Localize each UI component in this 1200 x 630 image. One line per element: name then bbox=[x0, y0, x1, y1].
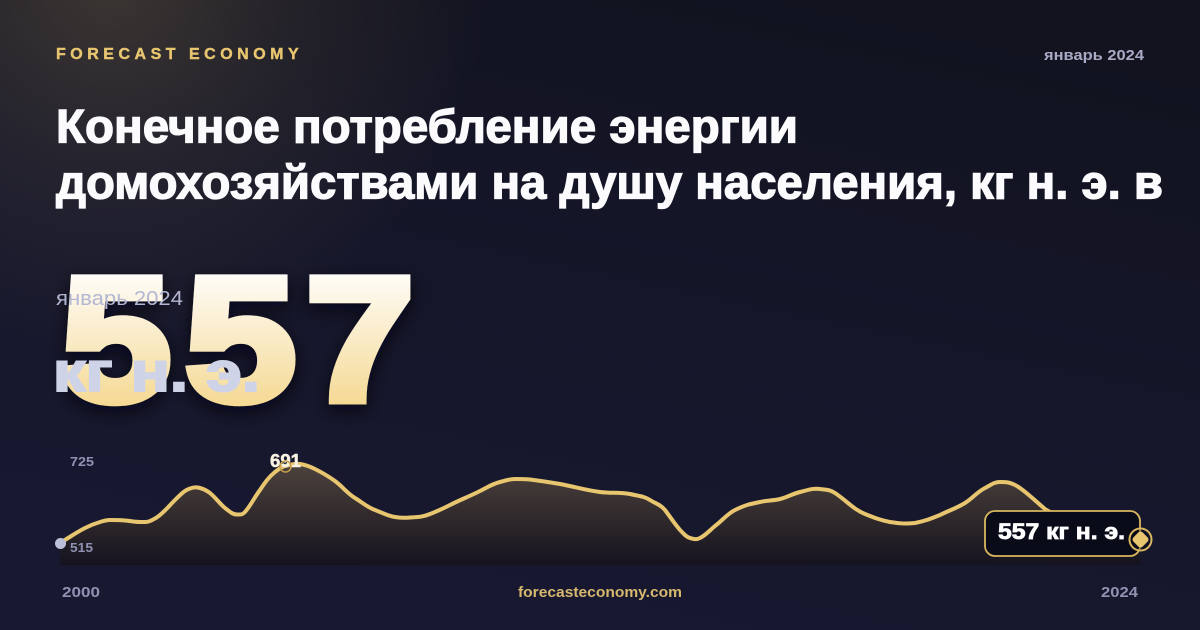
chart bbox=[55, 451, 1152, 565]
current value callout bbox=[985, 511, 1140, 556]
data line bbox=[60, 464, 1140, 543]
area under line bbox=[60, 464, 1141, 565]
axis max label: 725 bbox=[70, 454, 94, 469]
big value 557: 7 bbox=[306, 242, 414, 438]
end point marker bbox=[1130, 528, 1152, 550]
start point marker bbox=[55, 538, 66, 549]
peak marker bbox=[280, 461, 291, 472]
source url: forecasteconomy.com bbox=[518, 584, 682, 601]
big value 557 bbox=[61, 242, 414, 438]
title bbox=[56, 100, 1163, 208]
x axis start year: 2000 bbox=[62, 584, 100, 601]
brand label: FORECAST ECONOMY bbox=[56, 46, 303, 63]
title: Конечное потребление энергии bbox=[56, 100, 798, 152]
axis min label: 515 bbox=[70, 540, 93, 555]
x axis end year: 2024 bbox=[1101, 584, 1139, 601]
title: домохозяйствами на душу населения, кг н. э. в bbox=[56, 156, 1163, 208]
date over value: январь 2024 bbox=[56, 288, 183, 310]
unit over value: кг н. э. bbox=[53, 340, 260, 403]
big value 557: 5 bbox=[185, 242, 296, 438]
peak value label: 691 bbox=[270, 451, 301, 471]
big value 557: 5 bbox=[61, 242, 171, 438]
date top right: январь 2024 bbox=[1044, 47, 1145, 64]
current value callout: 557 кг н. э. bbox=[998, 519, 1125, 544]
